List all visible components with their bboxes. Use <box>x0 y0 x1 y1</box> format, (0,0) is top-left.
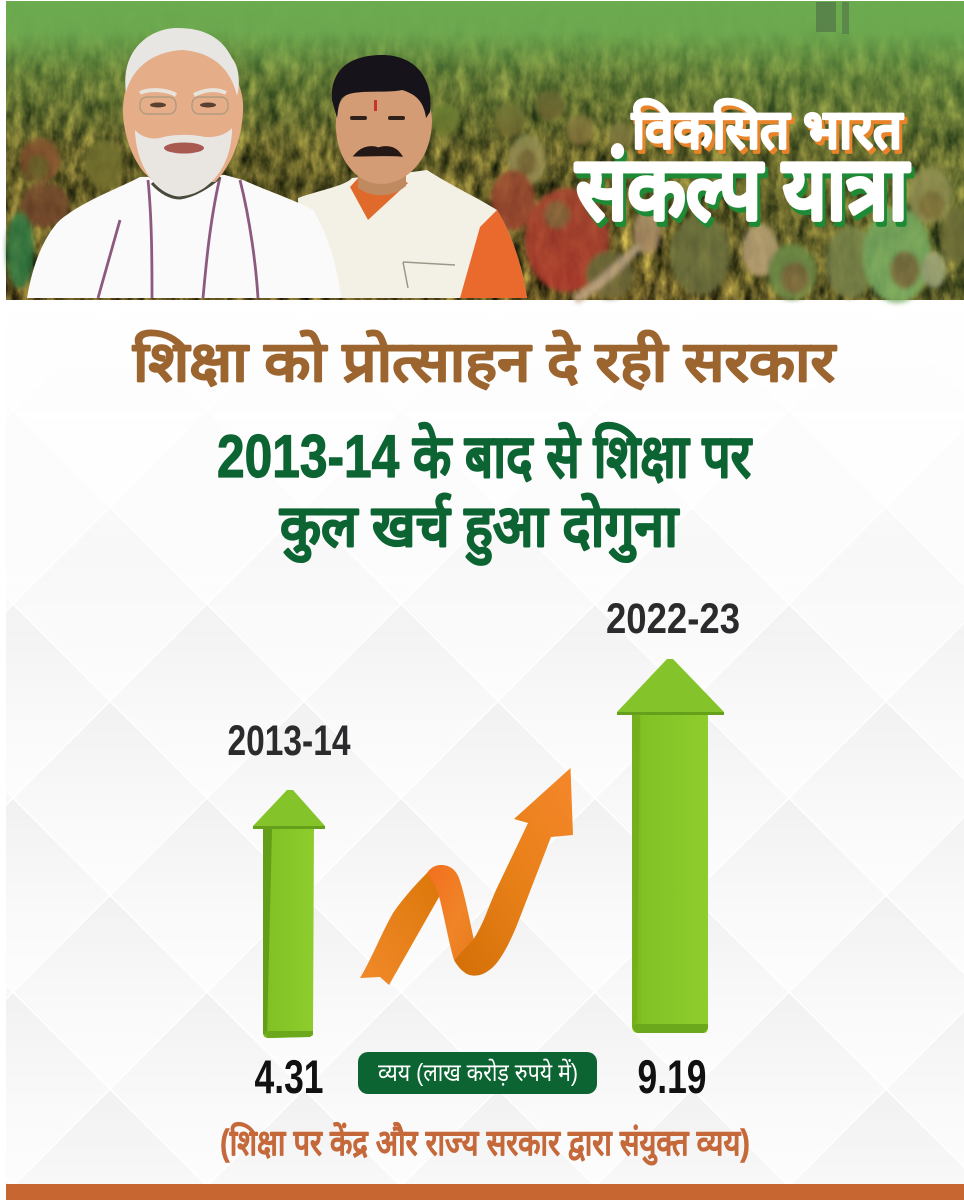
unit label pill <box>358 1052 597 1094</box>
unit label pill: व्यय (लाख करोड़ रुपये में) <box>378 1058 578 1087</box>
bottom bar <box>6 1184 964 1200</box>
small green arrow <box>253 790 325 1038</box>
title: शिक्षा को प्रोत्साहन दे रही सरकार <box>132 329 837 393</box>
crowd photo background <box>6 1 964 303</box>
footnote: (शिक्षा पर केंद्र और राज्य सरकार द्वारा संयुक्त व्यय) <box>220 1122 750 1166</box>
year label 2013-14: 2013-14 <box>228 717 351 765</box>
portrait: second man <box>298 55 527 298</box>
year label 2022-23: 2022-23 <box>606 595 740 643</box>
portrait: first man <box>27 28 341 298</box>
heading line 1: 2013-14 के बाद से शिक्षा पर <box>217 422 753 490</box>
banner logo: sankalp yatra: संकल्प यात्रा <box>574 139 911 238</box>
large green arrow <box>617 659 724 1033</box>
banner <box>6 1 964 303</box>
heading line 2: कुल खर्च हुआ दोगुना <box>279 493 680 566</box>
value 9.19: 9.19 <box>638 1050 706 1103</box>
banner logo: vikasit bharat: विकसित भारत <box>634 102 907 164</box>
banner logo: sankalp yatra: संकल्प यात्रा <box>577 144 914 243</box>
value 4.31: 4.31 <box>254 1050 324 1103</box>
orange growth arrow <box>360 768 573 985</box>
banner logo: vikasit bharat: विकसित भारत <box>631 98 904 160</box>
